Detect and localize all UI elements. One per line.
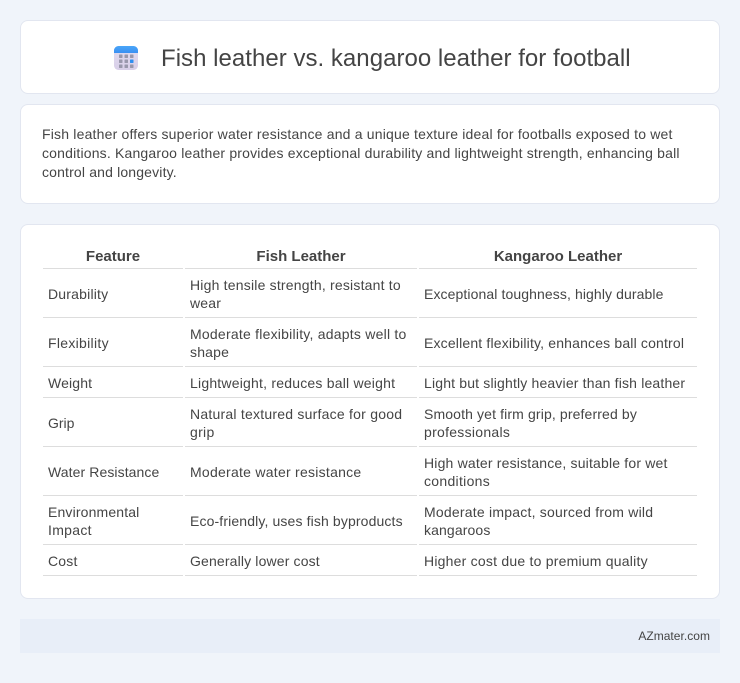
comparison table: Flexibility xyxy=(48,335,109,351)
comparison table: Higher cost due to premium quality xyxy=(424,553,648,569)
comparison table: Impact xyxy=(48,522,92,538)
comparison table: Exceptional toughness, highly durable xyxy=(424,286,664,302)
comparison table: Natural textured surface for good xyxy=(190,406,402,422)
comparison table: Water Resistance xyxy=(48,464,159,480)
comparison table: Lightweight, reduces ball weight xyxy=(190,375,395,391)
footer bar xyxy=(20,619,720,653)
title: Fish leather vs. kangaroo leather for football xyxy=(161,45,631,72)
footer credit: AZmater.com xyxy=(638,629,710,643)
comparison table: High tensile strength, resistant to xyxy=(190,277,401,293)
comparison table: Moderate water resistance xyxy=(190,464,361,480)
comparison table: Moderate flexibility, adapts well to xyxy=(190,326,407,342)
comparison table: Environmental xyxy=(48,504,139,520)
icon: calendar xyxy=(114,46,138,70)
summary text xyxy=(42,126,680,180)
summary text: conditions. Kangaroo leather provides exceptional durability and lightweight strength, enhancing ball xyxy=(42,145,680,161)
comparison table: Light but slightly heavier than fish leather xyxy=(424,375,685,391)
comparison table: Kangaroo Leather xyxy=(494,248,622,265)
comparison table: Feature xyxy=(86,248,140,265)
summary text: Fish leather offers superior water resistance and a unique texture ideal for footballs exposed to wet xyxy=(42,126,673,142)
comparison table: Grip xyxy=(48,415,74,431)
comparison table: wear xyxy=(190,295,221,311)
comparison table: shape xyxy=(190,344,229,360)
comparison table panel xyxy=(20,224,720,599)
comparison table: Smooth yet firm grip, preferred by xyxy=(424,406,637,422)
comparison table: Moderate impact, sourced from wild xyxy=(424,504,653,520)
comparison table: Eco-friendly, uses fish byproducts xyxy=(190,513,403,529)
summary text: control and longevity. xyxy=(42,164,177,180)
comparison table: Generally lower cost xyxy=(190,553,320,569)
comparison table: High water resistance, suitable for wet xyxy=(424,455,668,471)
comparison table: grip xyxy=(190,424,215,440)
comparison table: conditions xyxy=(424,473,490,489)
comparison table: kangaroos xyxy=(424,522,490,538)
comparison table: Weight xyxy=(48,375,92,391)
comparison table: Durability xyxy=(48,286,108,302)
comparison table: professionals xyxy=(424,424,510,440)
summary panel xyxy=(20,104,720,204)
comparison table: Fish Leather xyxy=(256,248,346,265)
comparison table: Excellent flexibility, enhances ball control xyxy=(424,335,684,351)
header panel xyxy=(20,20,720,94)
comparison table xyxy=(43,248,697,576)
comparison table: Cost xyxy=(48,553,78,569)
